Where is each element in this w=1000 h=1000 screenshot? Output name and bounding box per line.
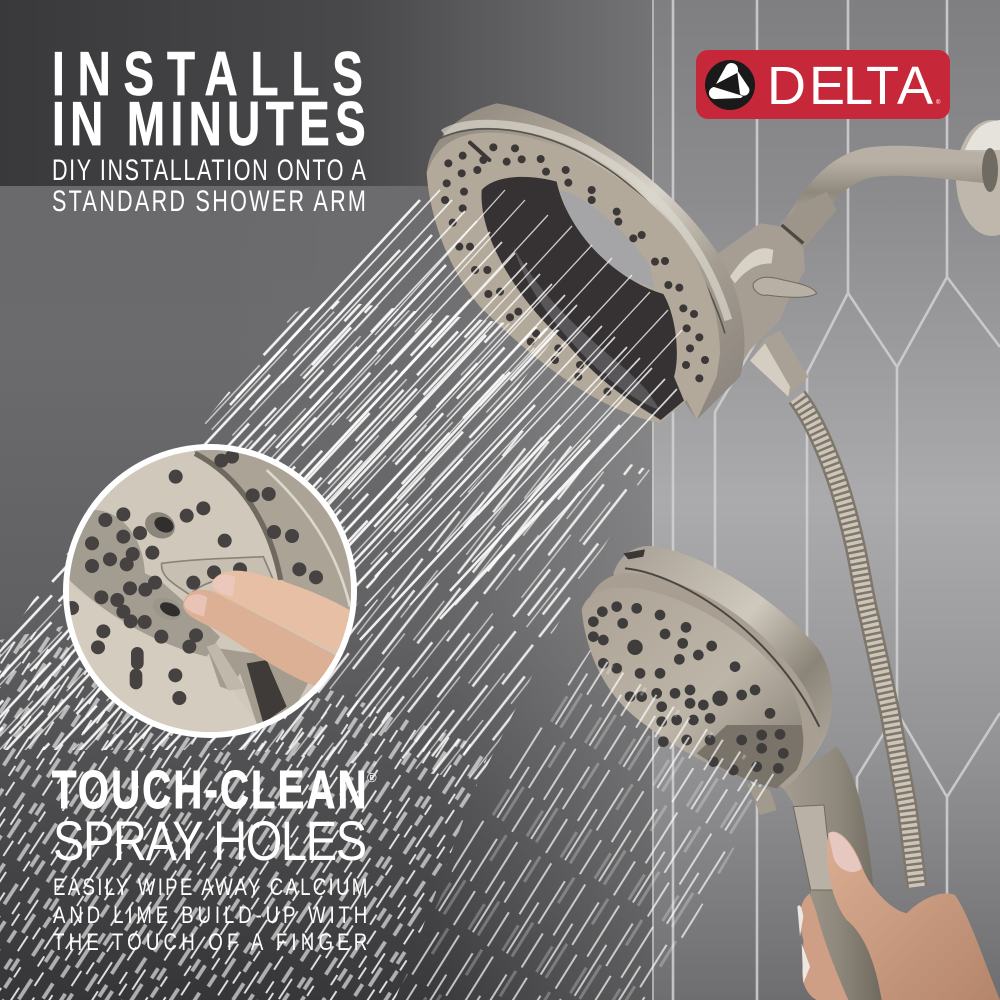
head: dark interior — [481, 177, 684, 420]
text: easily wipe away calcium — [53, 874, 367, 956]
heading: installs in minutes: INSTALLS — [52, 39, 363, 109]
head: bright band — [443, 124, 728, 320]
hand shower handle — [747, 747, 882, 1000]
background: tile wall — [652, 0, 1000, 1000]
close-up: central spray plate — [69, 510, 220, 657]
flexible hose — [797, 397, 917, 887]
inset circle: touch-clean close-up — [60, 440, 360, 740]
close-up: lower face — [67, 582, 260, 737]
diverter valve — [703, 192, 837, 397]
head: centre opening — [560, 190, 655, 288]
heading: touch-clean spray holes: SPRAY HOLES — [53, 809, 367, 872]
water spray from hand shower — [395, 650, 775, 1000]
close-up: two fingers — [183, 571, 351, 687]
heading: installs in minutes — [52, 39, 366, 159]
hand holding the shower — [797, 832, 1000, 1000]
text: diy installation: STANDARD SHOWER ARM — [52, 183, 366, 218]
text: easily wipe away calcium: THE TOUCH OF A FINGER — [53, 929, 367, 956]
logo icon: delta triangle — [705, 60, 755, 110]
heading: touch-clean spray holes: ® — [367, 770, 377, 785]
shower arm and flange — [790, 120, 1000, 240]
text: diy installation — [52, 152, 366, 218]
hand shower: spray face — [582, 587, 802, 788]
main shower head — [427, 103, 744, 423]
delta logo: DELTA — [767, 56, 933, 116]
head: outer rim — [427, 103, 744, 420]
water lines crossing the head interior — [375, 190, 682, 525]
close-up: metal ring — [194, 450, 351, 622]
text: easily wipe away calcium: EASILY WIPE AWAY CALCIUM — [53, 874, 367, 901]
heading: touch-clean spray holes: TOUCH-CLEAN — [52, 760, 367, 821]
delta logo — [696, 50, 950, 119]
background: left wall — [0, 0, 660, 1000]
heading: installs in minutes: IN MINUTES — [52, 89, 366, 159]
close-up: spray holes — [72, 457, 316, 698]
heading: touch-clean spray holes — [52, 760, 377, 872]
close-up: spray button — [207, 643, 313, 727]
head: spray face — [427, 133, 720, 423]
hand shower: spray holes — [593, 607, 783, 770]
text: easily wipe away calcium: AND LIME BUILD-UP WITH — [53, 902, 367, 929]
hand shower head — [582, 546, 832, 788]
water spray from main shower head — [0, 190, 682, 1000]
delta logo: ® — [936, 99, 941, 106]
text: diy installation: DIY INSTALLATION ONTO A — [52, 152, 366, 187]
head: spray holes — [445, 147, 705, 392]
lower hose connector — [750, 331, 808, 397]
background: dark top band — [0, 0, 655, 186]
